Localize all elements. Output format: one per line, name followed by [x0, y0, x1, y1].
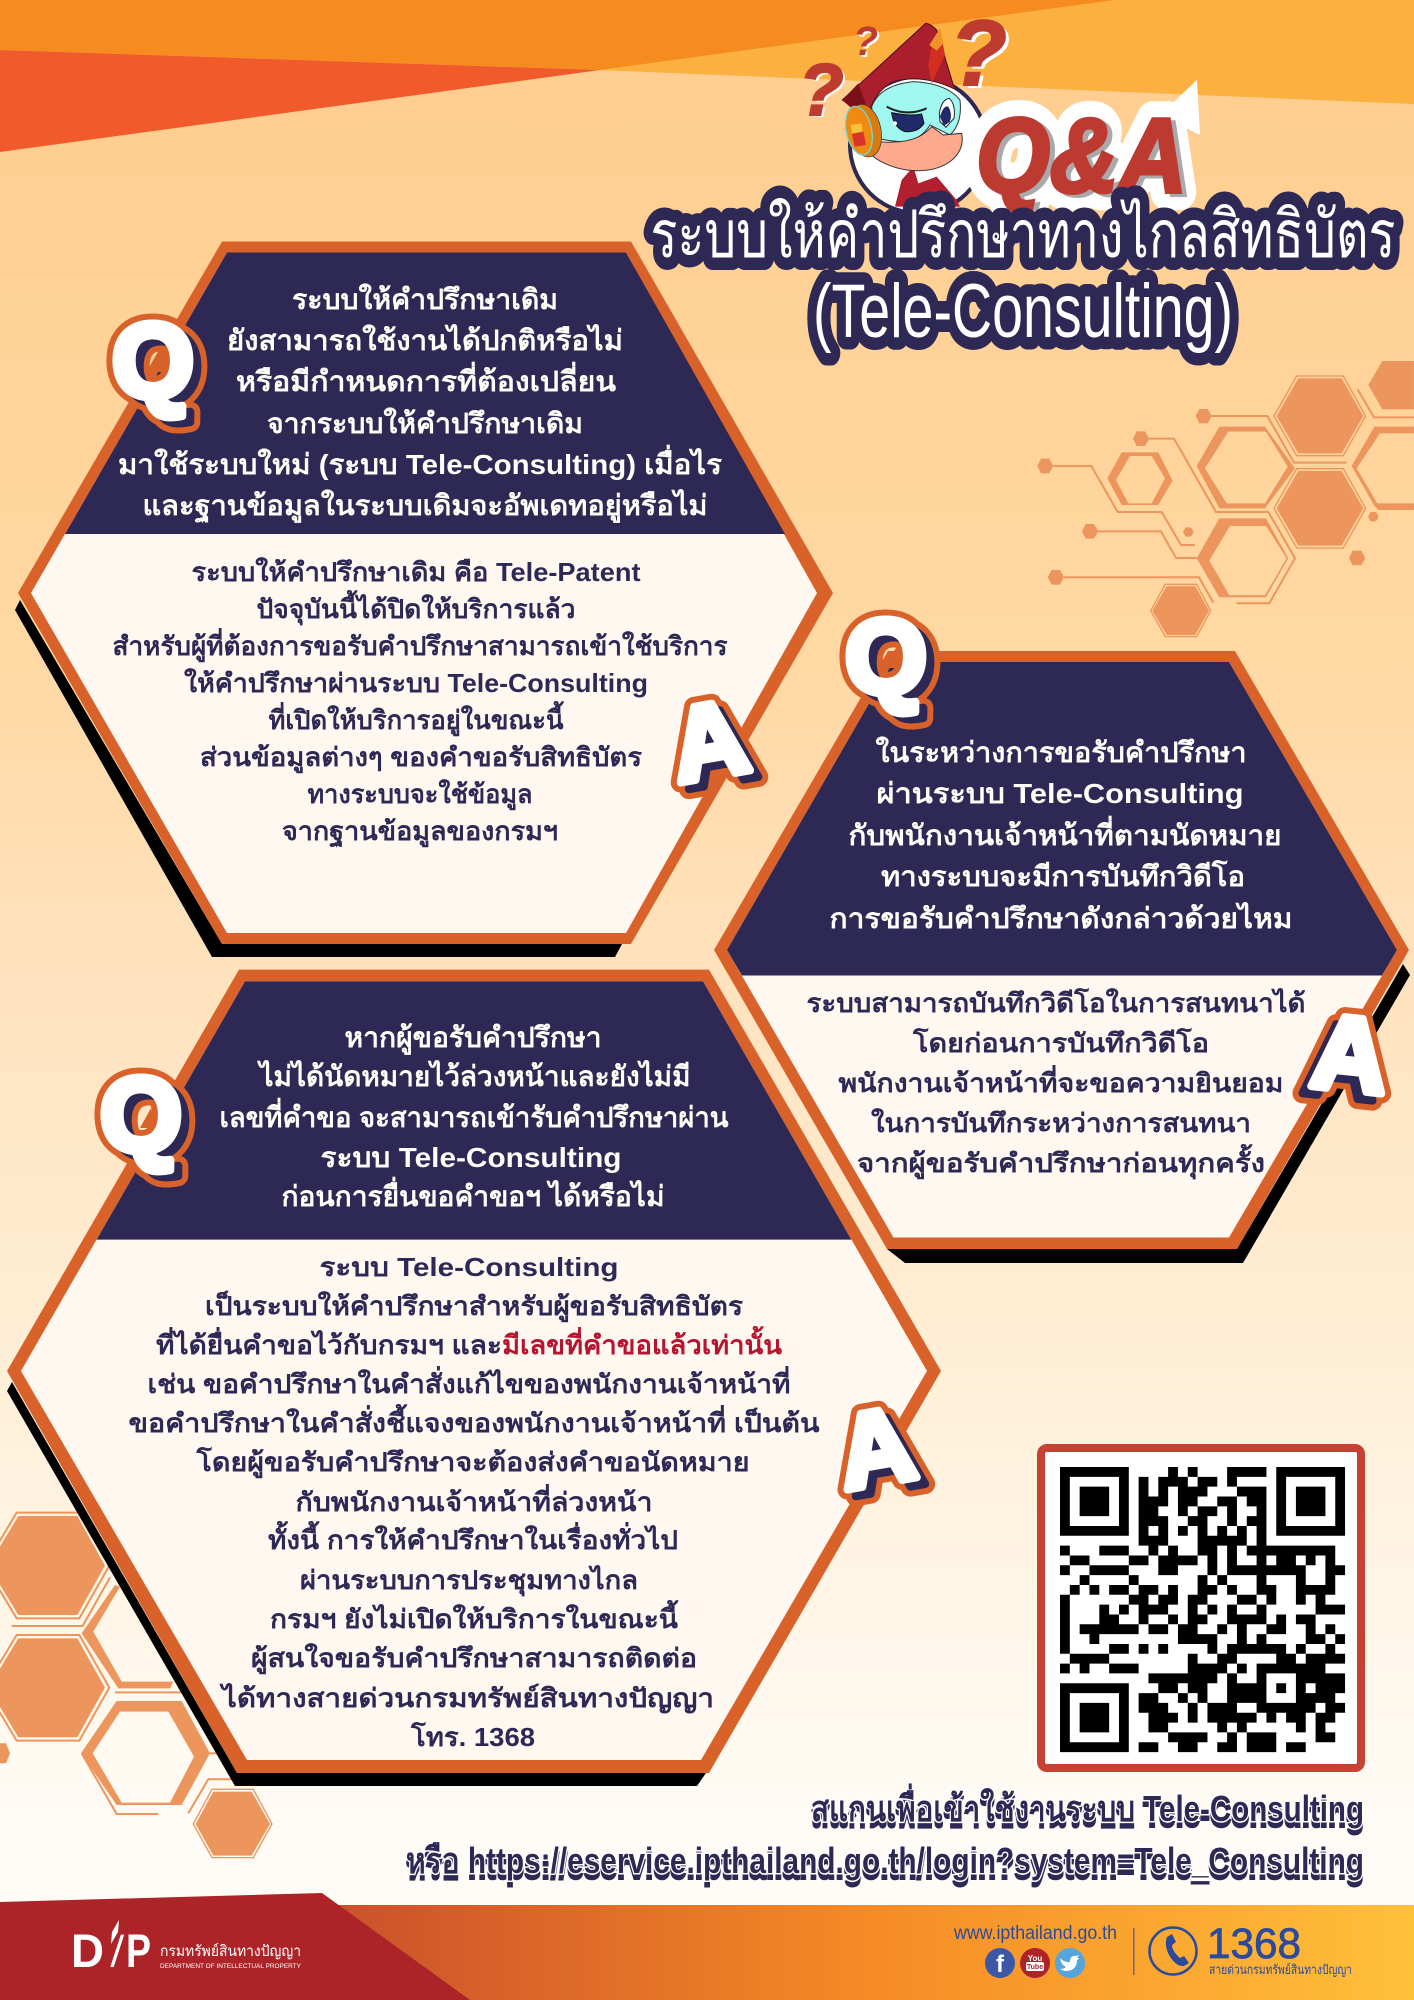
question 3 text: หากผู้ขอรับคำปรึกษา — [344, 1022, 602, 1055]
answer 3 text: ขอคำปรึกษาในคำสั่งชี้แจงของพนักงานเจ้าหน้าที่ เป็นต้น — [128, 1403, 820, 1438]
question 3 text: ไม่ได้นัดหมายไว้ล่วงหน้าและยังไม่มี — [257, 1060, 690, 1092]
badge: A panel 3: A — [837, 1391, 932, 1519]
badge: Q panel 3: Q — [100, 1057, 182, 1174]
answer 1 text: ระบบให้คำปรึกษาเดิม คือ Tele-Patent — [192, 557, 641, 587]
badge: A panel 2: A — [1297, 999, 1385, 1124]
question 1 text: และฐานข้อมูลในระบบเดิมจะอัพเดทอยู่หรือไม่ — [142, 489, 708, 524]
QR code panel — [1041, 1448, 1361, 1768]
badge: Q panel 1: Q — [120, 309, 202, 426]
icon: small question mark: ? — [855, 20, 880, 66]
question 3 text: ระบบ Tele-Consulting — [320, 1142, 622, 1173]
badge: A panel 2: A — [1306, 992, 1394, 1117]
answer 2 text — [806, 987, 1306, 1180]
answer 3 text: โทร. 1368 — [410, 1721, 535, 1752]
logo: DIP department of intellectual property: P — [126, 1924, 151, 1977]
badge: A panel 1: A — [662, 677, 757, 806]
question 2 text: ทางระบบจะมีการบันทึกวิดีโอ — [881, 859, 1245, 892]
question 1 text: มาใช้ระบบใหม่ (ระบบ Tele-Consulting) เมื่อไร — [118, 444, 722, 480]
answer 3 text: ที่ได้ยื่นคำขอไว้กับกรมฯ และ — [156, 1326, 502, 1360]
panel: question and answer 2 — [714, 651, 1410, 1263]
panel: question and answer 1 — [15, 242, 833, 957]
badge: A panel 3: A — [829, 1384, 924, 1513]
heading: Q&A: Q&A — [981, 100, 1192, 218]
hotline caption: สายด่วนกรมทรัพย์สินทางปัญญา — [1209, 1962, 1352, 1977]
question 3 text: เลขที่คำขอ จะสามารถเข้ารับคำปรึกษาผ่าน — [220, 1097, 728, 1133]
question 1 text — [118, 283, 722, 524]
icon: large question mark: ? — [954, 4, 1011, 108]
icon: phone hotline — [1150, 1928, 1196, 1974]
answer 3 text: ผ่านระบบการประชุมทางไกล — [300, 1564, 638, 1597]
logo: DIP department of intellectual property: D — [71, 1924, 104, 1977]
icon: youtube — [1020, 1948, 1050, 1978]
badge: Q panel 2: Q — [853, 605, 935, 722]
badge: Q panel 1: Q — [112, 303, 194, 420]
badge: Q panel 3: Q — [108, 1063, 190, 1180]
question 2 text: ผ่านระบบ Tele-Consulting — [876, 778, 1244, 809]
badge: A panel 2: A — [1297, 999, 1385, 1124]
icon: mascot character with question marks — [841, 23, 987, 213]
question 1 text: หรือมีกำหนดการที่ต้องเปลี่ยน — [236, 361, 616, 397]
badge: A panel 1: A — [670, 684, 765, 812]
icon: small question mark: ? — [853, 18, 878, 64]
answer 2 text: จากผู้ขอรับคำปรึกษาก่อนทุกครั้ง — [857, 1143, 1265, 1180]
icon: twitter — [1055, 1948, 1085, 1978]
answer 3 text: ระบบ Tele-Consulting — [320, 1252, 618, 1282]
question 2 text: กับพนักงานเจ้าหน้าที่ตามนัดหมาย — [848, 815, 1282, 851]
answer 3 text: มีเลขที่คำขอแล้วเท่านั้น — [502, 1325, 782, 1360]
badge: A panel 1: A — [670, 684, 765, 812]
answer 1 text — [112, 557, 728, 849]
answer 3 text: เช่น ขอคำปรึกษาในคำสั่งแก้ไขของพนักงานเจ้าหน้าที่ — [148, 1365, 790, 1399]
icon: youtube: Tube — [1027, 1964, 1043, 1971]
heading: Q&A: Q&A — [976, 97, 1187, 215]
logo: DIP department of intellectual property: กรมทรัพย์สินทางปัญญา — [160, 1943, 301, 1960]
badge: A panel 2: A — [1306, 992, 1394, 1117]
question 1 text: จากระบบให้คำปรึกษาเดิม — [267, 407, 583, 439]
icon: facebook: f — [996, 1951, 1005, 1978]
icon: large question mark: ? — [950, 1, 1007, 105]
top colour bands — [0, 0, 1414, 152]
hotline number: 1368 — [1207, 1920, 1301, 1968]
badge: Q panel 2: Q — [845, 599, 927, 716]
logo: DIP department of intellectual property: DEPARTMENT OF INTELLECTUAL PROPERTY — [160, 1964, 301, 1970]
icon: medium question mark: ? — [799, 50, 844, 131]
answer 1 text: ที่เปิดให้บริการอยู่ในขณะนี้ — [268, 700, 565, 737]
answer 1 text: สำหรับผู้ที่ต้องการขอรับคำปรึกษาสามารถเข้าใช้บริการ — [112, 627, 728, 663]
answer 1 text: ให้คำปรึกษาผ่านระบบ Tele-Consulting — [184, 668, 648, 698]
answer 2 text: ระบบสามารถบันทึกวิดีโอในการสนทนาได้ — [806, 987, 1306, 1018]
question 1 text: ยังสามารถใช้งานได้ปกติหรือไม่ — [227, 324, 623, 356]
answer 1 text: ทางระบบจะใช้ข้อมูล — [308, 779, 532, 811]
divider line — [1133, 1928, 1134, 1975]
answer 3 text: กรมฯ ยังไม่เปิดให้บริการในขณะนี้ — [270, 1599, 679, 1634]
icon: youtube: You — [1028, 1954, 1042, 1963]
question 2 text: ในระหว่างการขอรับคำปรึกษา — [876, 736, 1246, 768]
answer 3 text: โดยผู้ขอรับคำปรึกษาจะต้องส่งคำขอนัดหมาย — [195, 1446, 750, 1479]
panel: question and answer 3 — [7, 970, 941, 1786]
question 3 text — [220, 1022, 728, 1212]
badge: Q panel 2: Q — [845, 599, 927, 716]
badge: Q panel 1: Q — [112, 303, 194, 420]
answer 3 text: ทั้งนี้ การให้คำปรึกษาในเรื่องทั่วไป — [268, 1520, 678, 1555]
badge: A panel 1: A — [662, 677, 757, 806]
answer 3 text: เป็นระบบให้คำปรึกษาสำหรับผู้ขอรับสิทธิบัตร — [205, 1290, 743, 1323]
badge: Q panel 1: Q — [120, 309, 202, 426]
badge: A panel 3: A — [837, 1391, 932, 1519]
answer 2 text: ในการบันทึกระหว่างการสนทนา — [871, 1108, 1251, 1138]
question 3 text: ก่อนการยื่นขอคำขอฯ ได้หรือไม่ — [282, 1176, 664, 1212]
title: Tele-Consulting: (Tele-Consulting) — [813, 269, 1233, 354]
badge: Q panel 2: Q — [853, 605, 935, 722]
icon: medium question mark: ? — [802, 52, 847, 133]
decoration: hexagon network top right — [1037, 361, 1414, 637]
answer 2 text: โดยก่อนการบันทึกวิดีโอ — [912, 1027, 1209, 1058]
badge: Q panel 3: Q — [108, 1063, 190, 1180]
answer 3 text: ได้ทางสายด่วนกรมทรัพย์สินทางปัญญา — [219, 1682, 714, 1714]
footer band — [0, 1893, 1414, 2000]
question 1 text: ระบบให้คำปรึกษาเดิม — [292, 283, 558, 315]
icon: facebook — [985, 1948, 1015, 1978]
answer 3 text — [128, 1252, 820, 1752]
question 2 text — [830, 736, 1292, 934]
heading: Q&A: Q&A — [976, 97, 1187, 215]
answer 3 text: กับพนักงานเจ้าหน้าที่ล่วงหน้า — [296, 1483, 652, 1517]
answer 2 text: พนักงานเจ้าหน้าที่จะขอความยินยอม — [838, 1064, 1284, 1098]
answer 1 text: ปัจจุบันนี้ได้ปิดให้บริการแล้ว — [256, 589, 576, 626]
answer 1 text: ส่วนข้อมูลต่างๆ ของคำขอรับสิทธิบัตร — [200, 742, 642, 774]
decoration: hexagon network bottom left — [0, 1513, 272, 1858]
badge: Q panel 3: Q — [100, 1057, 182, 1174]
logo: DIP department of intellectual property — [71, 1920, 301, 1978]
question 2 text: การขอรับคำปรึกษาดังกล่าวด้วยไหม — [830, 902, 1292, 934]
logo: DIP department of intellectual property: I — [104, 1925, 131, 1978]
footer contact: website: www.ipthailand.go.th — [953, 1923, 1117, 1944]
answer 3 text: ผู้สนใจขอรับคำปรึกษาสามารถติดต่อ — [251, 1643, 697, 1675]
badge: A panel 3: A — [829, 1384, 924, 1513]
answer 1 text: จากฐานข้อมูลของกรมฯ — [282, 816, 558, 849]
